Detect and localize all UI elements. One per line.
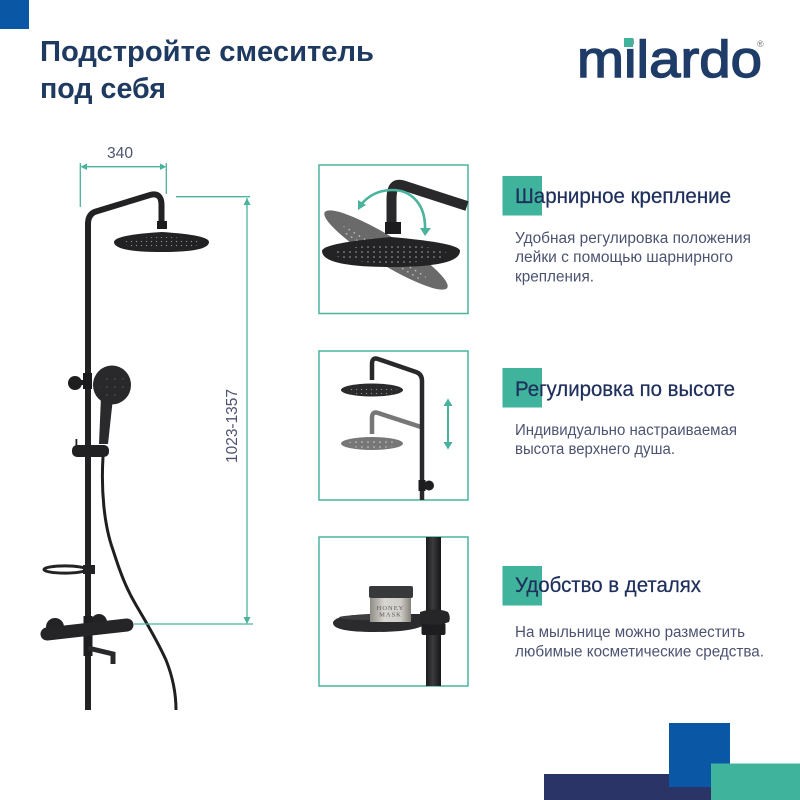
dish [333,610,450,635]
feature: details [502,566,764,660]
flexible hose [102,457,176,710]
knob [418,480,434,491]
rotation arrow [358,190,431,236]
dimension: height 1023-1357 [134,197,253,624]
feature: details: На мыльнице можно разместить [515,624,745,641]
feature: swivel joint: Шарнирное крепление [515,185,731,208]
shower head [322,237,460,267]
ghost tilted head [317,200,455,300]
feature: swivel joint [502,176,751,286]
dimension: height 1023-1357: 1023-1357 [224,389,241,463]
hand shower [93,366,131,444]
soap dish [44,565,95,574]
dimension: width 340: 340 [107,145,133,162]
dimension: width 340 [80,145,166,207]
title: Подстройте смеситель [40,36,374,68]
riser pipe and overhead arm [88,194,162,710]
overhead shower head [114,221,209,252]
wall knob and holder [68,373,92,390]
panel: height adjustment [319,351,468,500]
product drawing: full shower system [44,194,209,710]
feature: height adjustment: высота верхнего душа. [515,441,675,458]
jar [369,586,413,622]
slider bracket [72,439,109,457]
pole [426,537,441,686]
jar: MASK [379,612,402,618]
feature: details: любимые косметические средства. [515,644,764,660]
thermostat mixer [46,614,127,656]
feature: swivel joint: Удобная регулировка положения [515,230,751,247]
feature: details: Удобство в деталях [515,574,701,597]
title [40,36,374,105]
decorative corner square [0,0,29,29]
feature: height adjustment: Регулировка по высоте [515,378,735,401]
spout [88,648,113,664]
panel: soap dish detail [319,537,468,686]
double arrow [444,398,452,450]
feature: swivel joint: крепления. [515,268,594,286]
decorative corner blocks [544,723,800,800]
jar: HONEY [377,605,404,612]
feature: swivel joint: лейки с помощью шарнирного [515,249,733,266]
upper shower [341,359,422,500]
feature: height adjustment: Индивидуально настраиваемая [515,422,737,439]
arm [392,185,467,224]
panel: swivel joint [317,165,468,314]
feature: height adjustment [502,368,737,458]
lower ghost shower [341,413,421,450]
logo: milardo: ® [757,39,764,49]
logo: milardo: milardo [577,31,762,89]
title: под себя [40,73,166,105]
